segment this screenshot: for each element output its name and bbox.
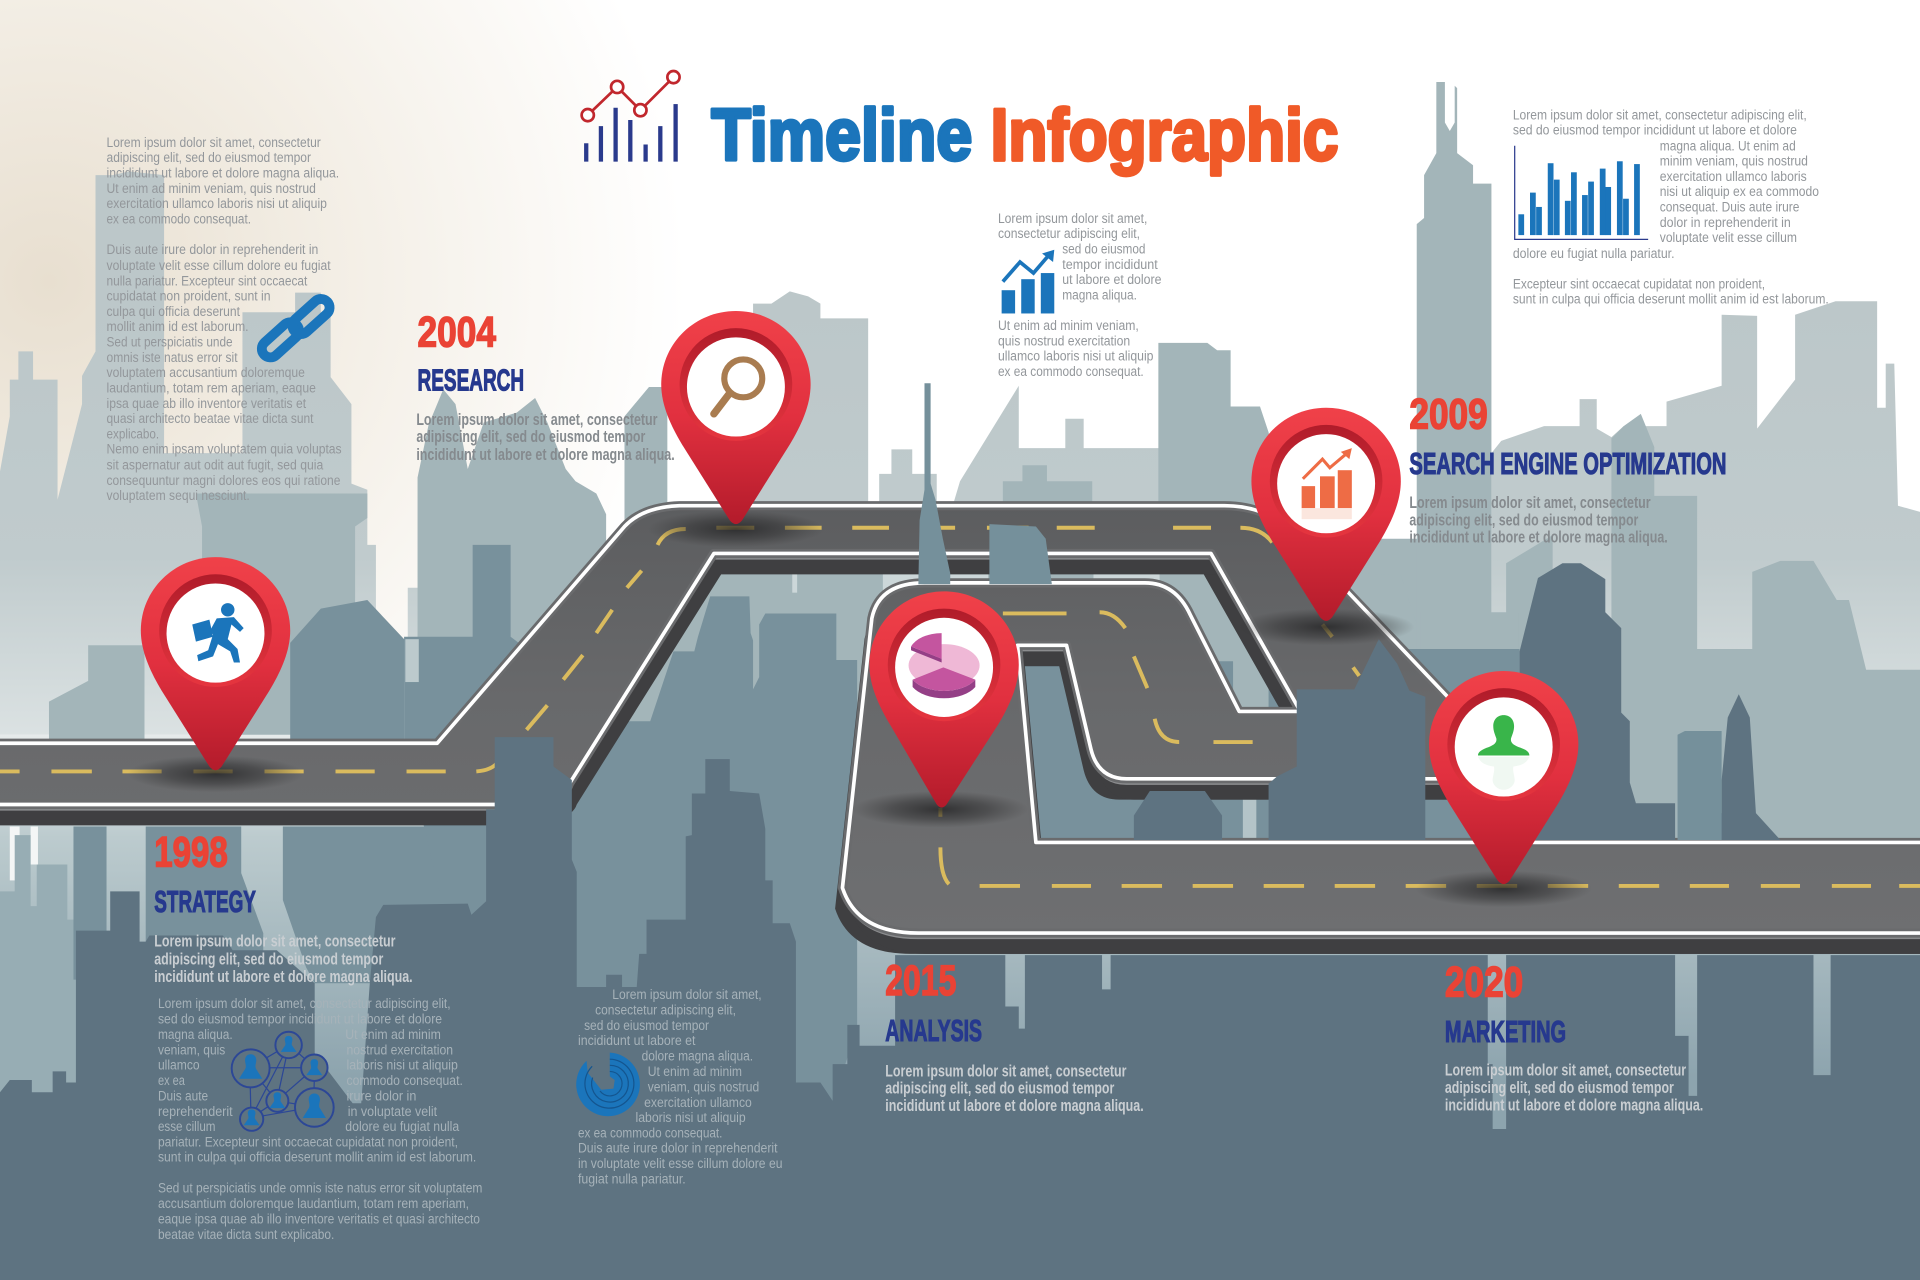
text block: top left paragraphs: Nemo enim ipsam voluptatem quia voluptas bbox=[107, 442, 342, 457]
text block: lower centre paragraph: laboris nisi ut aliquip bbox=[636, 1110, 746, 1125]
icon: people network bbox=[232, 1032, 334, 1131]
milestone text: 1998 strategy bbox=[154, 828, 413, 986]
icon: chain link bbox=[258, 295, 333, 361]
text block: lower left paragraphs: ullamco bbox=[158, 1058, 200, 1073]
text block: top right paragraphs: consequat. Duis aute irure bbox=[1660, 200, 1799, 215]
milestone text: 1998 strategy: incididunt ut labore et dolore magna aliqua. bbox=[154, 967, 413, 986]
skyline: blue-gray buildings over road bbox=[918, 383, 1722, 840]
text block: lower left paragraphs: commodo consequat. bbox=[347, 1073, 463, 1088]
text block: top right paragraphs bbox=[1513, 107, 1829, 307]
text block: centre top paragraph: quis nostrud exercitation bbox=[998, 333, 1130, 348]
text block: centre top paragraph: magna aliqua. bbox=[1062, 287, 1137, 302]
text block: top right paragraphs: magna aliqua. Ut enim ad bbox=[1660, 138, 1796, 153]
title: Timeline bbox=[711, 93, 972, 176]
milestone text: 2004 research: adipiscing elit, sed do eiusmod tempor bbox=[416, 427, 646, 446]
milestone text: 2009 search engine optimization: adipiscing elit, sed do eiusmod tempor bbox=[1409, 510, 1639, 529]
pin: analysis bbox=[852, 591, 1029, 828]
icon: magnifier bbox=[714, 359, 762, 414]
road centre dashes bbox=[0, 528, 1920, 886]
milestone text: 2004 research: Lorem ipsum dolor sit amet, consectetur bbox=[416, 410, 658, 429]
text block: top left paragraphs: Duis aute irure dolor in reprehenderit in bbox=[107, 242, 318, 257]
milestone text: 2015 analysis: incididunt ut labore et dolore magna aliqua. bbox=[885, 1096, 1144, 1115]
text block: top right paragraphs: sed do eiusmod tempor incididunt ut labore et dolore bbox=[1513, 123, 1797, 138]
skyline: pale slots under top road bbox=[792, 569, 1160, 593]
text block: centre top paragraph: consectetur adipiscing elit, bbox=[998, 226, 1140, 241]
icon: running man bbox=[192, 603, 244, 662]
text block: lower centre paragraph: ex ea commodo consequat. bbox=[578, 1126, 722, 1141]
text block: lower centre paragraph: incididunt ut labore et bbox=[578, 1033, 696, 1048]
text block: top left paragraphs: explicabo. bbox=[107, 426, 159, 441]
milestone text: 2020 marketing: MARKETING bbox=[1445, 1015, 1566, 1049]
milestone text: 2020 marketing: Lorem ipsum dolor sit amet, consectetur bbox=[1445, 1061, 1687, 1080]
text block: lower left paragraphs: magna aliqua. bbox=[158, 1027, 233, 1042]
text block: centre top paragraph: tempor incididunt bbox=[1062, 257, 1158, 272]
skyline: near mid layer bbox=[73, 545, 1520, 1102]
text block: lower centre paragraph: veniam, quis nostrud bbox=[648, 1079, 759, 1094]
skyline: far layer bbox=[0, 171, 1920, 784]
milestone text: 2020 marketing bbox=[1445, 959, 1703, 1115]
text block: lower left paragraphs: Lorem ipsum dolor sit amet, consectetur adipiscing elit, bbox=[158, 996, 451, 1011]
skyline: white gaps under the road bbox=[10, 827, 38, 880]
milestone text: 1998 strategy: Lorem ipsum dolor sit amet, consectetur bbox=[154, 932, 396, 951]
milestone text: 2009 search engine optimization: 2009 bbox=[1409, 391, 1488, 439]
text block: lower left paragraphs bbox=[158, 996, 482, 1242]
text block: top left paragraphs: cupidatat non proident, sunt in bbox=[107, 289, 271, 304]
text block: lower left paragraphs: veniam, quis bbox=[158, 1042, 225, 1057]
text block: top left paragraphs: ipsa quae ab illo inventore veritatis et bbox=[107, 396, 306, 411]
text block: top left paragraphs: omnis iste natus error sit bbox=[107, 350, 238, 365]
milestone text: 1998 strategy: adipiscing elit, sed do eiusmod tempor bbox=[154, 949, 384, 968]
text block: top right paragraphs: dolor in reprehenderit in bbox=[1660, 215, 1791, 230]
text block: top left paragraphs: voluptatem accusantium doloremque bbox=[107, 365, 305, 380]
text block: lower centre paragraph: in voluptate velit esse cillum dolore eu bbox=[578, 1156, 782, 1171]
pin: strategy bbox=[127, 557, 304, 792]
milestone text: 2009 search engine optimization: SEARCH ENGINE OPTIMIZATION bbox=[1409, 447, 1727, 481]
text block: lower left paragraphs: laboris nisi ut aliquip bbox=[347, 1058, 458, 1073]
text block: lower left paragraphs: sed do eiusmod tempor incididunt ut labore et dolore bbox=[158, 1012, 442, 1027]
text block: centre top paragraph: Lorem ipsum dolor sit amet, bbox=[998, 211, 1147, 226]
milestone text: 2004 research: incididunt ut labore et dolore magna aliqua. bbox=[416, 445, 675, 464]
text block: centre top paragraph: ut labore et dolore bbox=[1062, 272, 1161, 287]
text block: lower centre paragraph: dolore magna aliqua. bbox=[642, 1048, 753, 1063]
text block: lower left paragraphs: nostrud exercitation bbox=[347, 1042, 453, 1057]
icon: growth bars with arrow bbox=[1002, 250, 1054, 313]
pin: research bbox=[648, 311, 824, 547]
text block: top left paragraphs: ex ea commodo consequat. bbox=[107, 211, 251, 226]
text block: top left paragraphs: nulla pariatur. Excepteur sint occaecat bbox=[107, 273, 308, 288]
milestone text: 2015 analysis: Lorem ipsum dolor sit amet, consectetur bbox=[885, 1061, 1127, 1080]
text block: top left paragraphs: quasi architecto beatae vitae dicta sunt bbox=[107, 411, 314, 426]
text block: top left paragraphs: culpa qui officia deserunt bbox=[107, 304, 240, 319]
milestone text: 2009 search engine optimization: incididunt ut labore et dolore magna aliqua. bbox=[1409, 527, 1668, 546]
skyline: foreground buildings bbox=[0, 563, 1920, 1280]
text block: lower left paragraphs: eaque ipsa quae ab illo inventore veritatis et quasi architecto bbox=[158, 1212, 480, 1227]
text block: top right paragraphs: dolore eu fugiat nulla pariatur. bbox=[1513, 246, 1674, 261]
text block: top right paragraphs: Lorem ipsum dolor sit amet, consectetur adipiscing elit, bbox=[1513, 107, 1807, 122]
milestone text: 2004 research: 2004 bbox=[418, 309, 496, 357]
text block: lower left paragraphs: sunt in culpa qui officia deserunt mollit anim id est laborum. bbox=[158, 1150, 476, 1165]
milestone text: 2004 research: RESEARCH bbox=[418, 364, 524, 398]
title bbox=[711, 93, 1338, 176]
text block: top left paragraphs: Ut enim ad minim veniam, quis nostrud bbox=[107, 181, 316, 196]
text block: top left paragraphs: consequuntur magni dolores eos qui ratione bbox=[107, 473, 340, 488]
text block: centre top paragraph: ullamco laboris nisi ut aliquip bbox=[998, 349, 1153, 364]
skyline: small haze gaps bbox=[405, 639, 1256, 839]
text block: lower left paragraphs: in voluptate velit bbox=[348, 1104, 437, 1119]
milestone text: 2015 analysis: ANALYSIS bbox=[885, 1014, 982, 1048]
skyline: pale left building block bbox=[0, 835, 76, 1102]
milestone text: 2015 analysis: adipiscing elit, sed do eiusmod tempor bbox=[885, 1078, 1115, 1097]
text block: lower centre paragraph: sed do eiusmod tempor bbox=[584, 1018, 709, 1033]
text block: top left paragraphs: exercitation ullamco laboris nisi ut aliquip bbox=[107, 196, 327, 211]
text block: lower left paragraphs: esse cillum bbox=[158, 1119, 216, 1134]
icon: pie chart bbox=[909, 633, 980, 698]
milestone text: 2015 analysis: 2015 bbox=[885, 957, 956, 1005]
text block: top left paragraphs: incididunt ut labore et dolore magna aliqua. bbox=[107, 166, 339, 181]
text block: top left paragraphs: Sed ut perspiciatis unde bbox=[107, 335, 233, 350]
text block: lower left paragraphs: irure dolor in bbox=[347, 1088, 416, 1103]
title icon: chart with trend line bbox=[582, 71, 680, 162]
bar chart icon bbox=[1515, 146, 1648, 239]
pin: search engine optimization bbox=[1238, 408, 1414, 645]
text block: top left paragraphs: voluptate velit esse cillum dolore eu fugiat bbox=[107, 258, 331, 273]
text block: top left paragraphs: sit aspernatur aut odit aut fugit, sed quia bbox=[107, 458, 324, 473]
text block: centre top paragraph: Ut enim ad minim veniam, bbox=[998, 318, 1139, 333]
icon: rising bars bbox=[1302, 448, 1352, 519]
milestone text: 2004 research bbox=[416, 309, 675, 464]
milestone text: 2020 marketing: adipiscing elit, sed do eiusmod tempor bbox=[1445, 1078, 1674, 1097]
milestone text: 2020 marketing: incididunt ut labore et dolore magna aliqua. bbox=[1445, 1096, 1703, 1115]
text block: lower left paragraphs: Duis aute bbox=[158, 1088, 208, 1103]
text block: top left paragraphs: voluptatem sequi nesciunt. bbox=[107, 488, 250, 503]
milestone text: 2009 search engine optimization bbox=[1409, 391, 1727, 546]
text block: lower centre paragraph: Duis aute irure dolor in reprehenderit bbox=[578, 1141, 778, 1156]
milestone text: 1998 strategy: 1998 bbox=[154, 828, 228, 876]
text block: top right paragraphs: exercitation ullamco laboris bbox=[1660, 169, 1807, 184]
skyline: lower haze base bbox=[0, 735, 1920, 1280]
milestone text: 2020 marketing: 2020 bbox=[1445, 959, 1523, 1007]
milestone text: 2009 search engine optimization: Lorem ipsum dolor sit amet, consectetur bbox=[1409, 493, 1651, 512]
text block: lower left paragraphs: Ut enim ad minim bbox=[345, 1027, 441, 1042]
text block: lower left paragraphs: Sed ut perspiciatis unde omnis iste natus error sit voluptatem bbox=[158, 1181, 482, 1196]
text block: centre top paragraph: sed do eiusmod bbox=[1062, 241, 1146, 256]
text block: lower centre paragraph: consectetur adipiscing elit, bbox=[595, 1003, 736, 1018]
text block: top right paragraphs: voluptate velit esse cillum bbox=[1660, 230, 1797, 245]
text block: lower left paragraphs: ex ea bbox=[158, 1073, 185, 1088]
text block: lower left paragraphs: accusantium doloremque laudantium, totam rem aperiam, bbox=[158, 1196, 469, 1211]
text block: top left paragraphs bbox=[107, 135, 342, 503]
text block: top right paragraphs: Excepteur sint occaecat cupidatat non proident, bbox=[1513, 276, 1765, 291]
skyline: middle layer bbox=[49, 82, 1920, 845]
text block: lower centre paragraph: Ut enim ad minim bbox=[648, 1064, 742, 1079]
text block: centre top paragraph bbox=[998, 211, 1161, 379]
text block: lower left paragraphs: reprehenderit bbox=[158, 1104, 233, 1119]
text block: lower left paragraphs: beatae vitae dicta sunt explicabo. bbox=[158, 1227, 334, 1242]
milestone text: 1998 strategy: STRATEGY bbox=[154, 885, 256, 919]
text block: top left paragraphs: adipiscing elit, sed do eiusmod tempor bbox=[107, 150, 311, 165]
text block: top right paragraphs: sunt in culpa qui officia deserunt mollit anim id est laborum. bbox=[1513, 292, 1829, 307]
text block: top right paragraphs: minim veniam, quis nostrud bbox=[1660, 153, 1808, 168]
text block: lower centre paragraph: exercitation ullamco bbox=[644, 1095, 752, 1110]
text block: lower centre paragraph bbox=[578, 987, 782, 1187]
text block: centre top paragraph: ex ea commodo consequat. bbox=[998, 364, 1144, 379]
text block: lower centre paragraph: Lorem ipsum dolor sit amet, bbox=[612, 987, 762, 1002]
pin: marketing bbox=[1416, 671, 1592, 907]
icon: person bbox=[1478, 715, 1529, 790]
title: Infographic bbox=[991, 93, 1338, 176]
text block: top right paragraphs: nisi ut aliquip ex ea commodo bbox=[1660, 184, 1819, 199]
text block: top left paragraphs: laudantium, totam rem aperiam, eaque bbox=[107, 380, 316, 395]
text block: top left paragraphs: mollit anim id est laborum. bbox=[107, 319, 249, 334]
text block: top left paragraphs: Lorem ipsum dolor sit amet, consectetur bbox=[107, 135, 321, 150]
road bbox=[0, 506, 1920, 954]
text block: lower centre paragraph: fugiat nulla pariatur. bbox=[578, 1172, 686, 1187]
icon: radial chart bbox=[576, 1053, 640, 1116]
milestone text: 2015 analysis bbox=[885, 957, 1144, 1115]
text block: lower left paragraphs: pariatur. Excepteur sint occaecat cupidatat non proident, bbox=[158, 1134, 458, 1149]
text block: lower left paragraphs: dolore eu fugiat nulla bbox=[345, 1119, 460, 1134]
